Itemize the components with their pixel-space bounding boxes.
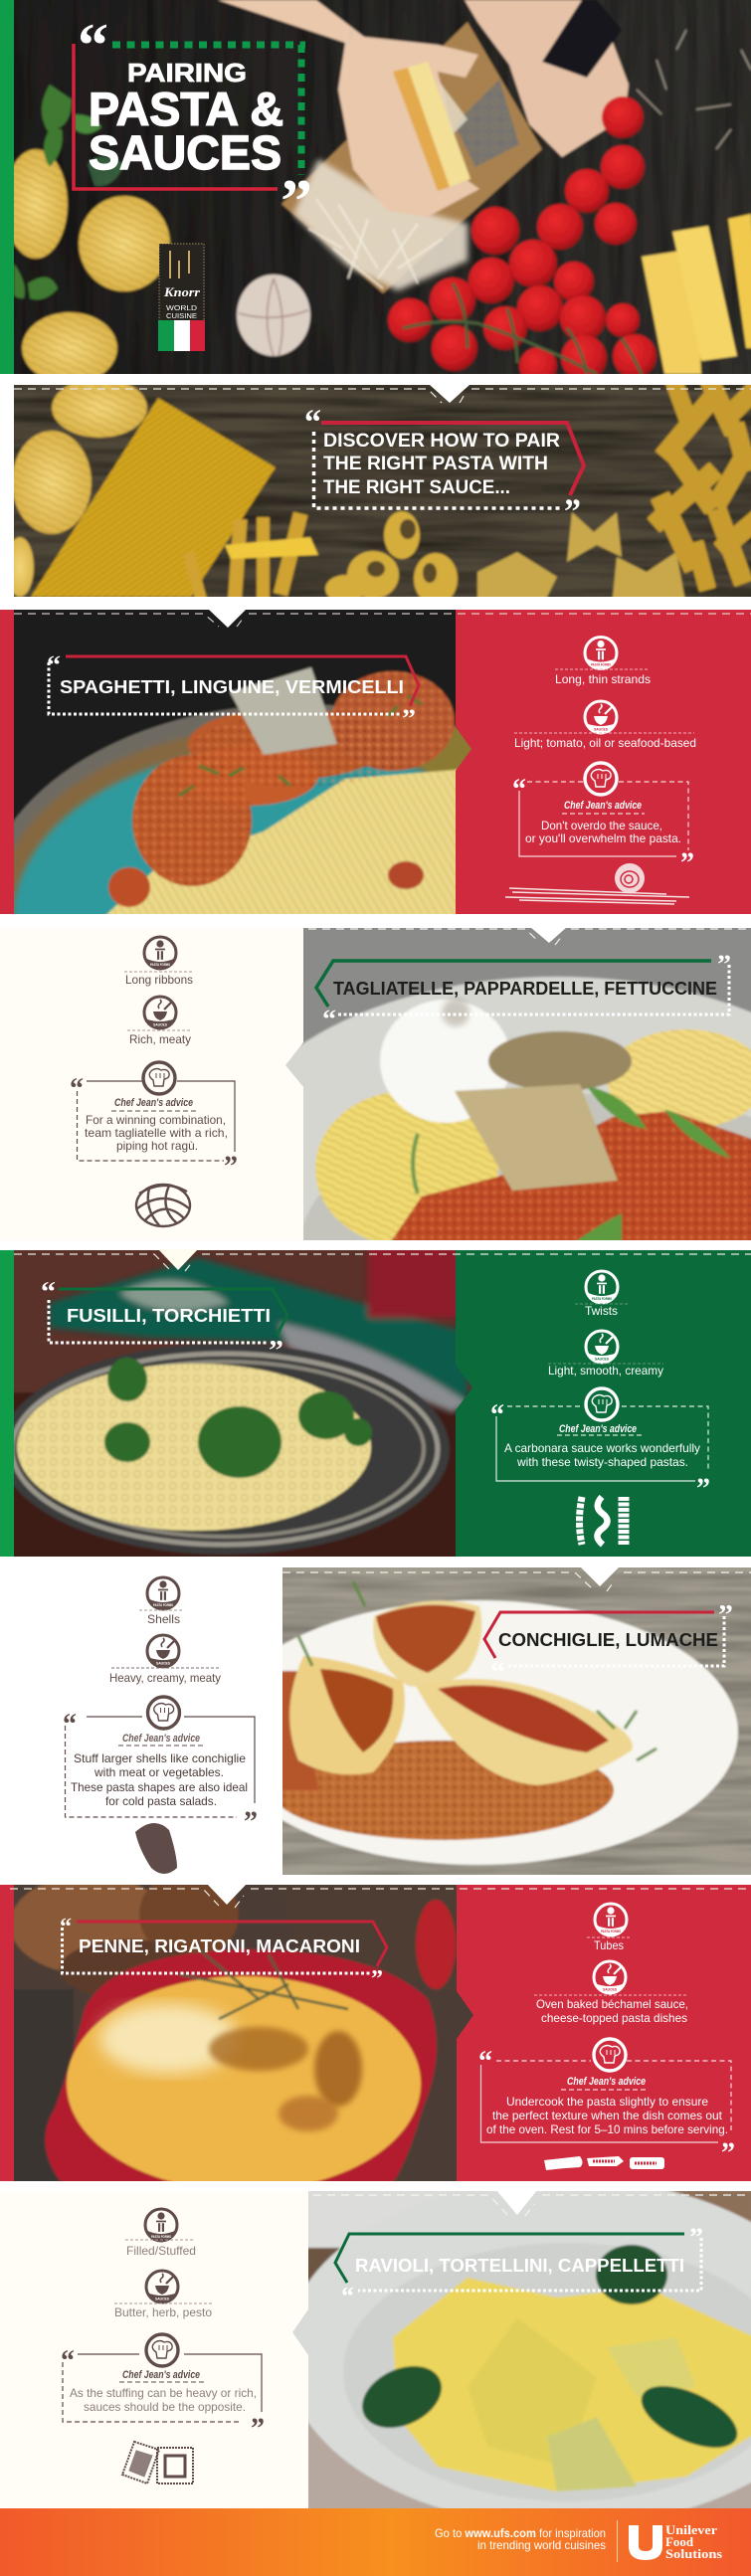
icon: chef hat [585, 763, 617, 795]
panel: conchiglie, lumache [63, 1562, 751, 1885]
callout: chef's advice [490, 1398, 710, 1505]
icon: pasta forms [145, 2209, 177, 2241]
heading frame: “ [47, 650, 61, 679]
heading text: FUSILLI, TORCHIETTI [67, 1306, 271, 1326]
callout: chef's advice: ” [721, 2136, 735, 2169]
callout: chef's advice: ” [696, 1472, 710, 1505]
heading frame: discover: ” [564, 491, 581, 531]
icon: chef hat [147, 1697, 179, 1729]
icon: pasta forms [144, 937, 176, 969]
heading text: TAGLIATELLE, PAPPARDELLE, FETTUCCINE [333, 979, 717, 999]
icon: pasta forms [585, 637, 617, 668]
icon: sauces [586, 1331, 618, 1364]
text: pasta form: Tubes [594, 1938, 624, 1952]
heading frame [484, 1600, 733, 1688]
text: pasta form: Twists [585, 1304, 618, 1318]
info column [505, 637, 696, 904]
panel: tagliatelle, pappardelle, fettuccine [0, 928, 751, 1240]
callout: chef's advice: Chef Jean's advice [114, 1097, 193, 1109]
icon: pasta forms: PASTA FORMS [150, 963, 171, 967]
heading text: CONCHIGLIE, LUMACHE [498, 1630, 718, 1650]
logo: Unilever Food Solutions [629, 2522, 722, 2561]
callout: chef's advice: Chef Jean's advice [122, 2369, 200, 2381]
callout: chef's advice [61, 2344, 265, 2445]
title text: SAUCES [89, 127, 282, 180]
badge: Knorr World Cuisine with Italian flag [158, 244, 205, 351]
text: pasta form: Filled/Stuffed [126, 2244, 196, 2258]
callout: chef's advice: “ [61, 2344, 75, 2377]
heading frame: ” [689, 2223, 703, 2252]
notch [308, 927, 751, 945]
callout: chef's advice: sauces should be the opposite. [84, 2400, 246, 2414]
info column [490, 1271, 710, 1545]
info column [61, 2209, 265, 2484]
icon: sauces: SAUCES [155, 2298, 170, 2301]
photo: fusilli with broccoli in striped bowl [0, 1243, 482, 1566]
icon: sauces: SAUCES [603, 1987, 618, 1991]
callout: chef's advice: “ [512, 773, 526, 806]
icon: sauces [146, 2271, 178, 2303]
callout: chef's advice: ” [251, 2412, 265, 2445]
notch [313, 2190, 751, 2216]
text: sauce: cheese-topped pasta dishes [541, 2011, 687, 2025]
logo: Unilever Food Solutions: Food [665, 2534, 694, 2549]
icon: pasta forms: PASTA FORMS [601, 1930, 622, 1933]
footer call to action [435, 2526, 606, 2552]
logo: Unilever Food Solutions: Unilever [665, 2522, 717, 2537]
callout: chef's advice: with meat or vegetables. [94, 1765, 224, 1779]
callout: chef's advice: These pasta shapes are also ideal [71, 1780, 248, 1794]
callout: chef's advice: ” [224, 1150, 238, 1183]
callout: chef's advice: For a winning combination, [86, 1113, 226, 1127]
callout: chef's advice: Chef Jean's advice [559, 1423, 637, 1435]
icon: pasta forms [586, 1271, 618, 1303]
title text: PAIRING [127, 58, 247, 88]
badge: Knorr World Cuisine with Italian flag: CUISINE [166, 311, 197, 320]
heading frame: ” [717, 950, 731, 979]
callout: chef's advice: A carbonara sauce works wonderfully [504, 1441, 700, 1455]
heading frame: ” [269, 1336, 283, 1367]
callout: chef's advice [512, 773, 694, 879]
photo: stuffed conchiglie on white plate [282, 1567, 751, 1875]
icon: shell [135, 1823, 177, 1874]
photo: ravioli with spinach in white bowl [292, 2191, 751, 2508]
info column [478, 1904, 735, 2170]
icon: chef hat [146, 2334, 178, 2366]
heading frame [316, 950, 731, 1033]
badge: Knorr World Cuisine with Italian flag: Knorr [163, 284, 201, 299]
callout: chef's advice [478, 2045, 735, 2169]
icon: fusilli shapes [579, 1497, 624, 1545]
text: sauce: Butter, herb, pesto [114, 2305, 212, 2319]
text: sauce: Heavy, creamy, meaty [109, 1671, 221, 1685]
callout: chef's advice: Stuff larger shells like conchiglie [74, 1751, 246, 1765]
heading text: RAVIOLI, TORTELLINI, CAPPELLETTI [355, 2256, 684, 2276]
panel: spaghetti, linguine, vermicelli [0, 610, 751, 914]
icon: sauces: SAUCES [156, 1661, 171, 1665]
callout: chef's advice: team tagliatelle with a rich, [85, 1126, 228, 1140]
icon: pasta forms [595, 1904, 627, 1935]
icon: pasta forms: PASTA FORMS [591, 662, 612, 666]
heading frame: “ [41, 1277, 56, 1308]
text: pasta form: Long ribbons [125, 973, 193, 987]
photo: spaghetti bolognese on teal plate [14, 610, 471, 914]
heading text: discover: THE RIGHT SAUCE... [323, 477, 510, 498]
callout: chef's advice: Undercook the pasta slightly to ensure [506, 2095, 708, 2109]
callout: chef's advice: for cold pasta salads. [105, 1794, 217, 1808]
hero photo: hands grating cheese with tomatoes and pasta [4, 0, 751, 385]
icon: sauces: SAUCES [595, 1357, 610, 1361]
callout: chef's advice: As the stuffing can be heavy or rich, [70, 2386, 257, 2400]
info column [70, 937, 238, 1226]
callout: chef's advice: Don't overdo the sauce, [541, 819, 662, 832]
badge: Knorr World Cuisine with Italian flag: WORLD [166, 303, 198, 312]
intro photo: dried pasta on wood [14, 385, 751, 597]
heading frame [41, 1277, 287, 1367]
text: sauce: Rich, meaty [129, 1032, 191, 1046]
heading frame: discover [304, 402, 584, 531]
text: pasta form: Long, thin strands [555, 672, 651, 686]
icon: sauces [594, 1961, 626, 1994]
heading frame: “ [322, 1005, 336, 1033]
heading frame: “ [490, 1657, 505, 1688]
callout: chef's advice: the perfect texture when the dish comes out [492, 2109, 723, 2122]
heading frame [47, 650, 419, 733]
icon: chef hat [143, 1062, 175, 1094]
icon: tube pasta shapes [544, 2156, 664, 2170]
closing quote: ” [281, 168, 312, 236]
heading frame [335, 2223, 703, 2310]
icon: tagliatelle nest [136, 1185, 190, 1226]
heading frame: ” [718, 1600, 733, 1631]
text: sauce [536, 1997, 688, 2025]
callout: chef's advice [63, 1708, 258, 1838]
panel: penne, rigatoni, macaroni [0, 1870, 751, 2193]
footer call to action: in trending world cuisines [477, 2538, 606, 2552]
icon: chef hat [586, 1388, 618, 1420]
callout: chef's advice: “ [478, 2045, 492, 2078]
icon: sauces [147, 1635, 179, 1668]
heading text: PENNE, RIGATONI, MACARONI [79, 1936, 360, 1956]
callout: chef's advice: Chef Jean's advice [567, 2076, 646, 2088]
text: sauce: Oven baked béchamel sauce, [536, 1997, 688, 2011]
heading text: discover: DISCOVER HOW TO PAIR [323, 431, 560, 452]
photo: tagliatelle with ragu, mushrooms and burrata [285, 928, 751, 1240]
callout: chef's advice: of the oven. Rest for 5–10 mins before serving. [486, 2122, 728, 2136]
icon: sauces [585, 701, 617, 734]
heading frame: “ [60, 1915, 72, 1940]
heading frame: “ [341, 2282, 354, 2310]
heading frame: discover: “ [304, 402, 321, 442]
footer call to action: Go to www.ufs.com for inspiration [435, 2526, 606, 2540]
notch [282, 1566, 751, 1591]
logo: Unilever Food Solutions: Solutions [665, 2546, 722, 2561]
icon: chef hat [594, 2039, 626, 2071]
info column [63, 1577, 258, 1874]
icon: sauces [144, 997, 176, 1029]
photo: baked macaroni in red dish [14, 1885, 473, 2181]
panel: ravioli, tortellini, cappelletti [0, 2178, 751, 2526]
callout: chef's advice: Chef Jean's advice [122, 1733, 200, 1745]
icon: ravioli [122, 2442, 193, 2484]
title text: PASTA & [89, 83, 283, 135]
title frame [74, 12, 312, 236]
heading text: discover: THE RIGHT PASTA WITH [323, 454, 548, 474]
text: sauce: Light; tomato, oil or seafood-based [514, 736, 696, 750]
callout: chef's advice: “ [70, 1072, 84, 1105]
heading frame: ” [402, 704, 416, 733]
title text [89, 58, 283, 180]
callout: chef's advice [70, 1072, 238, 1183]
opening quote: “ [78, 12, 108, 80]
heading text: SPAGHETTI, LINGUINE, VERMICELLI [60, 677, 404, 697]
icon: spaghetti [505, 863, 689, 904]
callout: chef's advice: “ [63, 1708, 77, 1741]
notch [14, 385, 751, 403]
notch [14, 1249, 751, 1271]
icon: pasta forms: PASTA FORMS [153, 1603, 174, 1607]
icon: sauces: SAUCES [594, 728, 609, 732]
callout: chef's advice: ” [244, 1805, 258, 1838]
heading text: discover [323, 431, 560, 498]
panel: footer [0, 2508, 751, 2576]
icon: pasta forms: PASTA FORMS [592, 1297, 613, 1301]
text: pasta form: Shells [147, 1612, 180, 1626]
icon: pasta forms: PASTA FORMS [151, 2235, 172, 2239]
callout: chef's advice: piping hot ragù. [116, 1139, 198, 1153]
notch [14, 609, 751, 628]
notch [10, 1884, 751, 1908]
callout: chef's advice: with these twisty-shaped pastas. [516, 1455, 688, 1469]
panel: hero [0, 0, 751, 385]
callout: chef's advice: or you'll overwhelm the pasta. [525, 831, 681, 845]
callout: chef's advice: Chef Jean's advice [564, 800, 642, 812]
icon: pasta forms [147, 1577, 179, 1609]
heading frame: ” [371, 1966, 383, 1992]
callout: chef's advice: ” [680, 846, 694, 879]
panel: fusilli, torchietti [0, 1243, 751, 1566]
icon: sauces: SAUCES [153, 1022, 168, 1026]
green side strip [0, 0, 14, 374]
panel: discover intro [14, 385, 751, 597]
callout: chef's advice: “ [490, 1398, 504, 1431]
heading frame [60, 1915, 387, 1992]
text: sauce: Light, smooth, creamy [548, 1364, 663, 1378]
